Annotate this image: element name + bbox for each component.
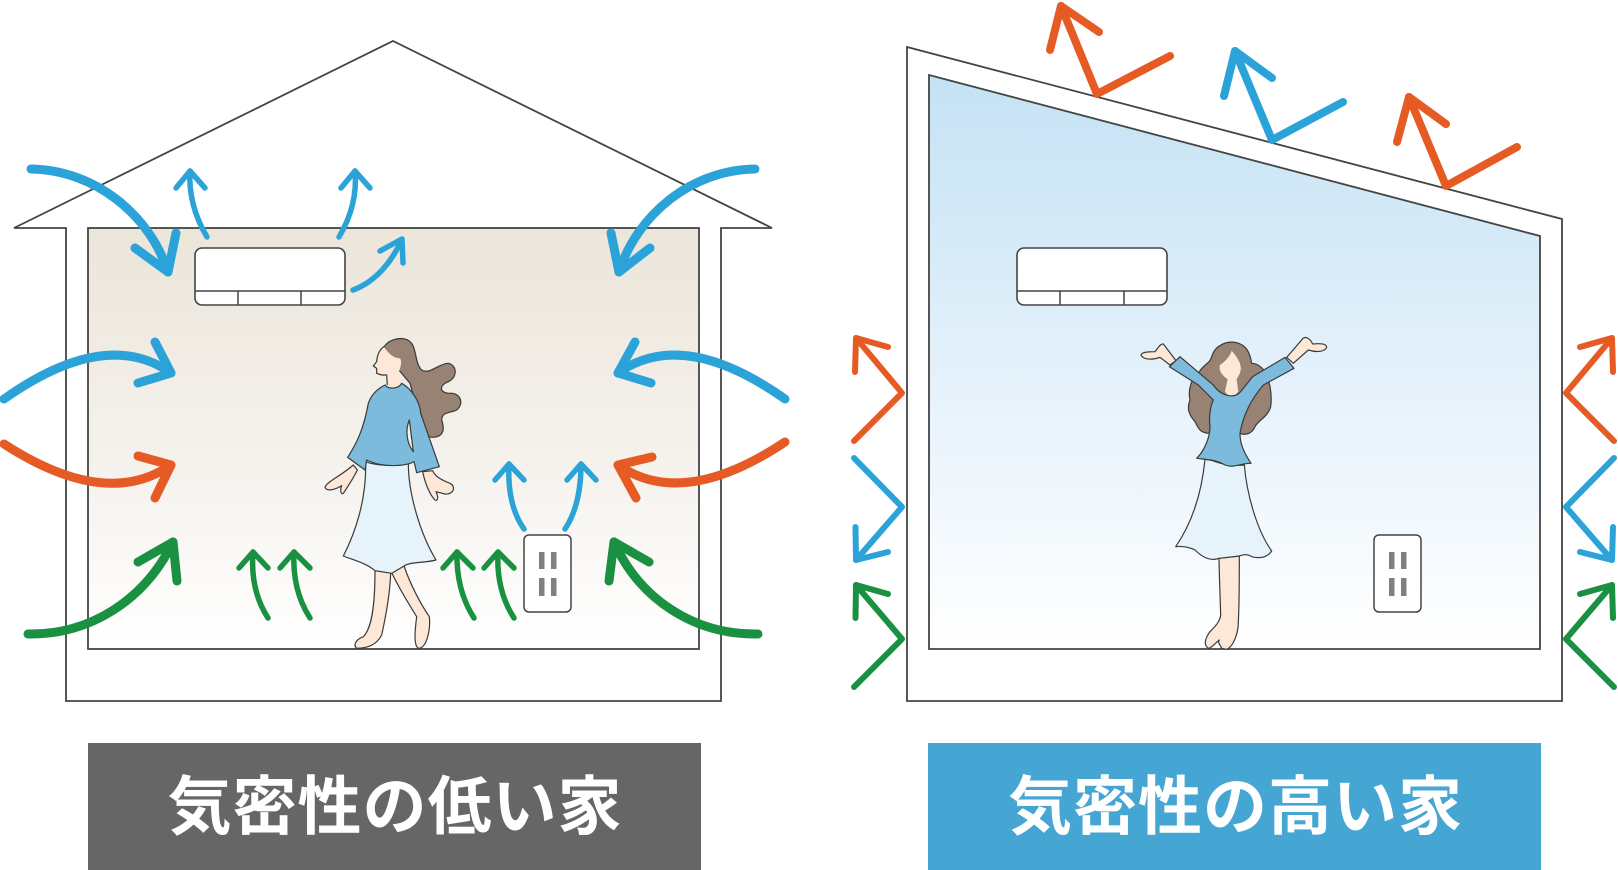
arrow: small green floor 4 — [484, 552, 514, 618]
arrow: left wall bounce green — [854, 585, 902, 687]
air conditioner — [195, 248, 345, 305]
arrow: small blue up from AC right — [339, 171, 370, 237]
woman with hair blown by draft — [325, 339, 461, 648]
arrow: small blue from vent right — [565, 464, 596, 529]
arrow: small green floor 3 — [443, 552, 474, 618]
label: high airtightness — [928, 743, 1541, 870]
arrow: small green floor 2 — [280, 552, 310, 618]
house outline with gable roof — [14, 41, 772, 701]
label: low airtightness — [88, 743, 701, 870]
wall vent — [524, 535, 571, 612]
air conditioner — [1017, 248, 1167, 305]
label: low airtightness: 気密性の低い家 — [168, 771, 622, 843]
panel: high airtightness house — [854, 6, 1614, 870]
interior room — [88, 228, 699, 649]
arrow: left wall bounce orange — [854, 338, 902, 441]
arrow: right wall bounce blue — [1566, 458, 1614, 560]
arrow: small blue from vent left — [495, 464, 524, 529]
arrow: green right — [609, 542, 758, 634]
arrow: large blue top right — [611, 169, 755, 272]
arrow: small green floor 1 — [239, 552, 268, 618]
arrow: small blue from AC side — [353, 239, 403, 290]
arrow: left wall bounce blue — [854, 458, 902, 560]
arrow: blue right middle — [618, 342, 785, 399]
wall vent — [1374, 535, 1421, 612]
woman with raised arms — [1141, 338, 1327, 649]
arrow: right wall bounce orange — [1566, 338, 1614, 441]
arrow: roof bounce orange 1 — [1050, 6, 1170, 94]
house outline with sloped roof — [907, 47, 1562, 701]
panel: low airtightness house — [4, 41, 785, 870]
arrow: roof bounce blue — [1224, 51, 1343, 140]
label: high airtightness: 気密性の高い家 — [1008, 771, 1463, 843]
arrow: green left — [28, 542, 177, 634]
arrow: roof bounce orange 2 — [1397, 97, 1517, 186]
arrow: orange left — [4, 444, 171, 498]
arrow: blue left middle — [4, 342, 171, 399]
arrow: large blue top left — [31, 169, 176, 272]
arrow: small blue up from AC left — [176, 171, 207, 237]
interior room — [929, 75, 1540, 649]
arrow: orange right — [618, 442, 785, 498]
arrow: right wall bounce green — [1566, 585, 1614, 687]
